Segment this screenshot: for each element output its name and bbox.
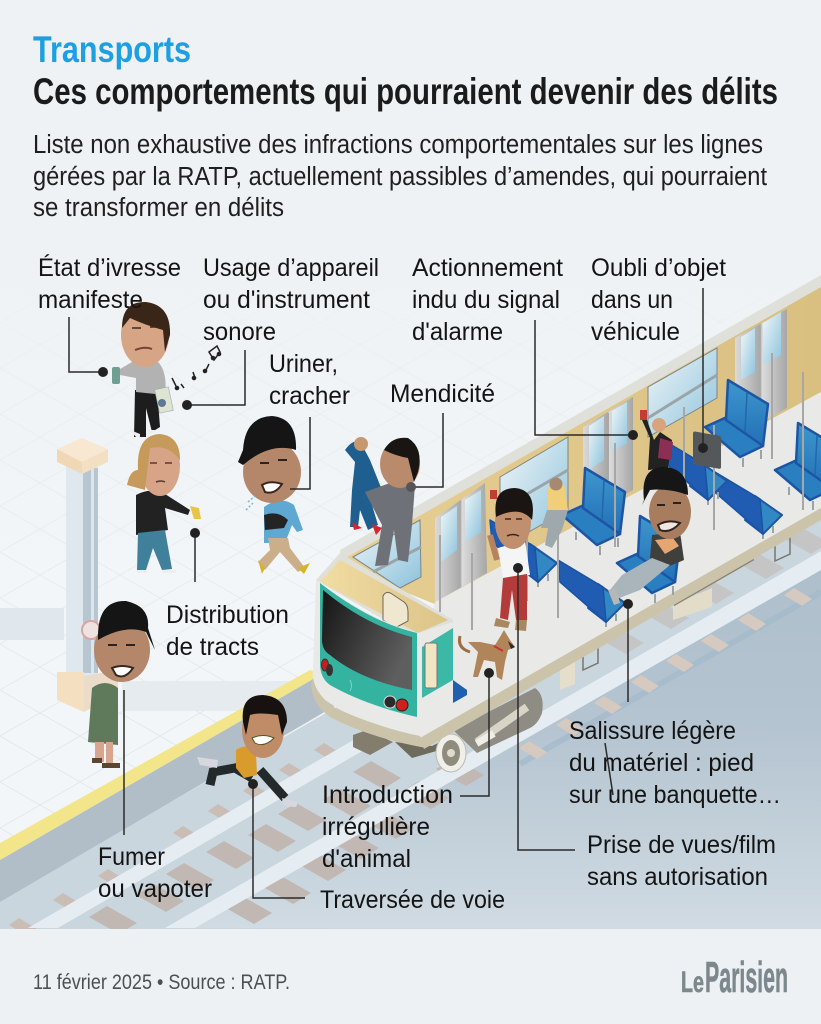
train (311, 275, 821, 772)
person: alarm puller with backpack (642, 418, 673, 470)
bogie (453, 688, 543, 753)
callout: traversée de voie: Traversée de voie (320, 886, 505, 914)
callout: introduction d'animal: d'animal (322, 845, 411, 873)
callout: mendicité (390, 380, 495, 492)
person: seated man with foot on seat (608, 467, 691, 605)
callout: oubli d'objet: dans un (591, 286, 673, 314)
callout: prise de vues: Prise de vues/film (587, 831, 776, 859)
source line: 11 février 2025 • Source : RATP. (33, 971, 290, 994)
footer band (0, 929, 821, 1024)
callout: signal d'alarme: Actionnement (412, 254, 563, 282)
intro text (33, 131, 767, 222)
dog (459, 630, 515, 680)
person: smoker in green coat (88, 601, 155, 768)
callout: état d'ivresse: État d’ivresse (38, 253, 181, 282)
callout: oubli d'objet: véhicule (591, 318, 680, 346)
person: man spitting in black cap (238, 416, 310, 574)
icon: suitcase (693, 431, 721, 469)
windows and doors (353, 309, 787, 602)
logo: Le Parisien (681, 953, 788, 1002)
callout: usage d'appareil sonore: sonore (203, 318, 276, 346)
intro text: gérées par la RATP, actuellement passibles d’amendes, qui pourraient (33, 163, 767, 191)
callout: mendicité: Mendicité (390, 380, 495, 408)
callout: salissure légère: sur une banquette… (569, 781, 781, 809)
callout: traversée de voie (248, 779, 505, 914)
person: man filming with phone (490, 488, 533, 631)
callout: uriner, cracher (269, 350, 350, 489)
callout: usage d'appareil sonore: ou d'instrument (203, 286, 370, 314)
cab partition (316, 553, 453, 640)
icon: music notes (172, 346, 221, 390)
callout: uriner, cracher: cracher (269, 382, 350, 410)
platform floor (0, 608, 312, 836)
callout: salissure légère: Salissure légère (569, 717, 736, 745)
callout: signal d'alarme: d'alarme (412, 318, 503, 346)
train wall (340, 283, 821, 605)
person: seated woman in yellow (541, 478, 568, 548)
alarm boxes (490, 490, 497, 499)
station pillar (57, 438, 118, 712)
callout: usage d'appareil sonore (182, 254, 379, 410)
callout: prise de vues: sans autorisation (587, 863, 768, 891)
seats (490, 380, 821, 627)
person: man with can and boombox (112, 302, 173, 437)
callout: oubli d'objet: Oubli d’objet (591, 254, 726, 282)
poles (440, 353, 803, 630)
callout: salissure légère (569, 599, 781, 809)
callout: fumer ou vapoter: Fumer (98, 843, 165, 871)
callout: prise de vues (513, 563, 776, 891)
person: woman with flyer (127, 434, 201, 573)
callout: introduction d'animal: irrégulière (322, 813, 430, 841)
callout: signal d'alarme (412, 254, 638, 440)
callout: distribution de tracts (166, 528, 289, 661)
person: man crossing the track (197, 695, 298, 807)
callout: introduction d'animal (322, 668, 494, 873)
callout: signal d'alarme: indu du signal (412, 286, 560, 314)
callout: fumer ou vapoter (98, 690, 212, 903)
callout: état d'ivresse: manifeste (38, 286, 143, 314)
train underframe (353, 534, 790, 772)
callout: état d'ivresse (38, 253, 181, 377)
callout: uriner, cracher: Uriner, (269, 350, 338, 378)
callout: usage d'appareil sonore: Usage d’appareil (203, 254, 379, 282)
intro text: se transformer en délits (33, 194, 284, 222)
callout: introduction d'animal: Introduction (322, 781, 453, 809)
person: beggar in grey with blue man (345, 437, 420, 566)
title: Transports (33, 29, 191, 70)
intro text: Liste non exhaustive des infractions comportementales sur les lignes (33, 131, 763, 159)
icon: no smoking sign (82, 621, 100, 639)
callout: salissure légère: du matériel : pied (569, 749, 754, 777)
railway ties (9, 526, 821, 936)
callout: distribution de tracts: de tracts (166, 633, 259, 661)
train floor (420, 392, 821, 738)
platform edge: yellow line (0, 670, 322, 860)
rails (28, 470, 821, 928)
track bed (0, 430, 821, 929)
callout: fumer ou vapoter: ou vapoter (98, 875, 212, 903)
callout: distribution de tracts: Distribution (166, 601, 289, 629)
logo: Le Parisien: Le (681, 966, 704, 999)
callout: oubli d'objet (591, 254, 726, 453)
cab front (311, 580, 467, 748)
